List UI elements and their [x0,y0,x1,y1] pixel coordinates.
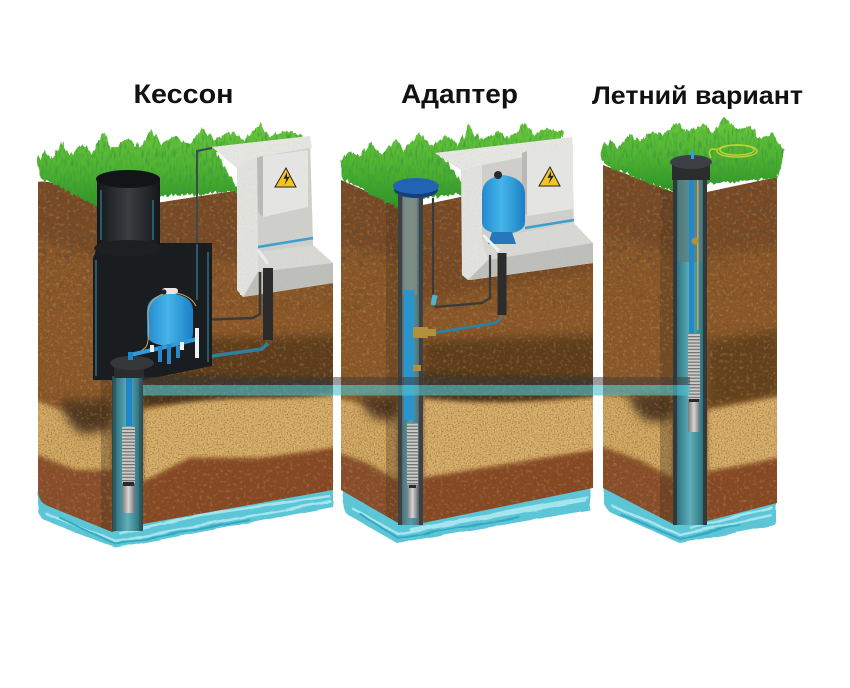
grass [600,116,784,192]
electrical box with warning sign [257,150,308,217]
borehole casing with submersible pump [112,376,143,531]
insulated water pipe [198,250,268,358]
borehole casing with submersible pump [398,195,423,525]
soil block with layers [600,160,780,530]
electrical box with warning sign [522,146,573,216]
blue cable on wall [258,238,313,247]
well head flange [110,352,154,378]
title: Адаптер: Адаптер [401,79,518,109]
thin conduit into caisson [197,148,212,245]
insulated water pipe and drop cable [433,198,502,333]
caisson chamber [93,170,212,380]
infographic: three well arrangement options [37,84,802,548]
yellow cable coil [710,145,757,158]
panel: adapter option [335,122,600,543]
panel: caisson option [30,124,340,548]
soil block with layers [341,180,593,523]
groundwater layer [38,480,333,548]
brass adapter fitting [413,327,436,371]
blue well cap [393,178,439,198]
blue cable on wall [525,220,574,228]
borehole casing with submersible pump [673,155,707,525]
title: Летний вариант: Летний вариант [592,82,803,110]
grass [37,124,302,208]
grass [341,122,563,207]
concrete wall and slab [212,136,333,297]
groundwater layer [343,478,590,543]
panel: summer option [600,116,784,543]
well head flange [670,150,712,180]
expansion tank with base [482,171,525,251]
title: Кессон: Кессон [134,79,234,109]
groundwater layer [604,482,776,543]
translucent horizontal band across panels [143,377,690,396]
soil block with layers [30,170,340,540]
expansion tank with piping [130,288,197,364]
concrete wall and slab [435,137,593,280]
